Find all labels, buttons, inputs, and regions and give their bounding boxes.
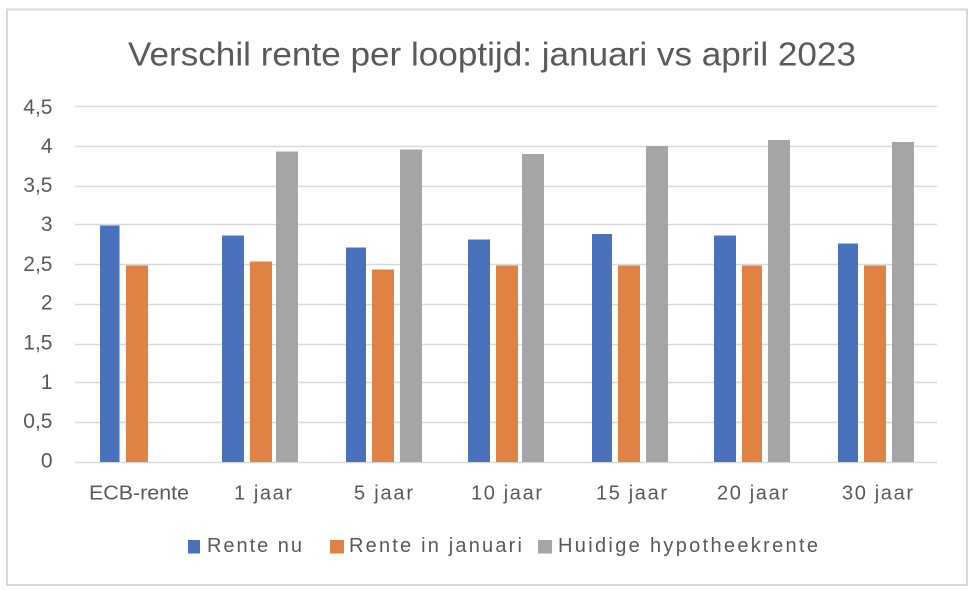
- y axis labels: 1: [41, 371, 52, 394]
- gridlines: [75, 106, 937, 462]
- legend item: Huidige hypotheekrente: Huidige hypotheekrente: [558, 535, 818, 557]
- y axis labels: 2,5: [23, 253, 52, 276]
- x axis labels: 5 jaar: [354, 482, 413, 504]
- y axis labels: 3,5: [23, 174, 52, 197]
- y axis labels: 4,5: [23, 96, 52, 119]
- x axis labels: 20 jaar: [717, 482, 788, 504]
- y axis labels: 3: [41, 213, 52, 236]
- x axis labels: ECB-rente: [89, 482, 189, 504]
- legend item: Rente in januari: Rente in januari: [349, 535, 522, 557]
- x axis labels: 1 jaar: [234, 482, 292, 504]
- bars: Rente in januari: [126, 262, 886, 462]
- x axis labels: 30 jaar: [842, 482, 913, 504]
- legend: [188, 535, 818, 557]
- x axis labels: 10 jaar: [471, 482, 542, 504]
- y axis labels: 2: [41, 292, 52, 314]
- y axis labels: 0,5: [23, 410, 52, 433]
- y axis labels: 0: [41, 450, 52, 472]
- y axis labels: 1,5: [23, 332, 52, 354]
- bars: Rente nu: [100, 226, 858, 462]
- y axis labels: 4: [41, 135, 53, 158]
- bars: Huidige hypotheekrente: [276, 140, 914, 462]
- legend item: Rente nu: Rente nu: [207, 535, 302, 557]
- x axis labels: 15 jaar: [596, 482, 667, 504]
- y axis labels: [23, 96, 53, 472]
- x axis labels: [89, 482, 913, 504]
- title: Verschil rente per looptijd: januari vs april 2023: [128, 36, 856, 74]
